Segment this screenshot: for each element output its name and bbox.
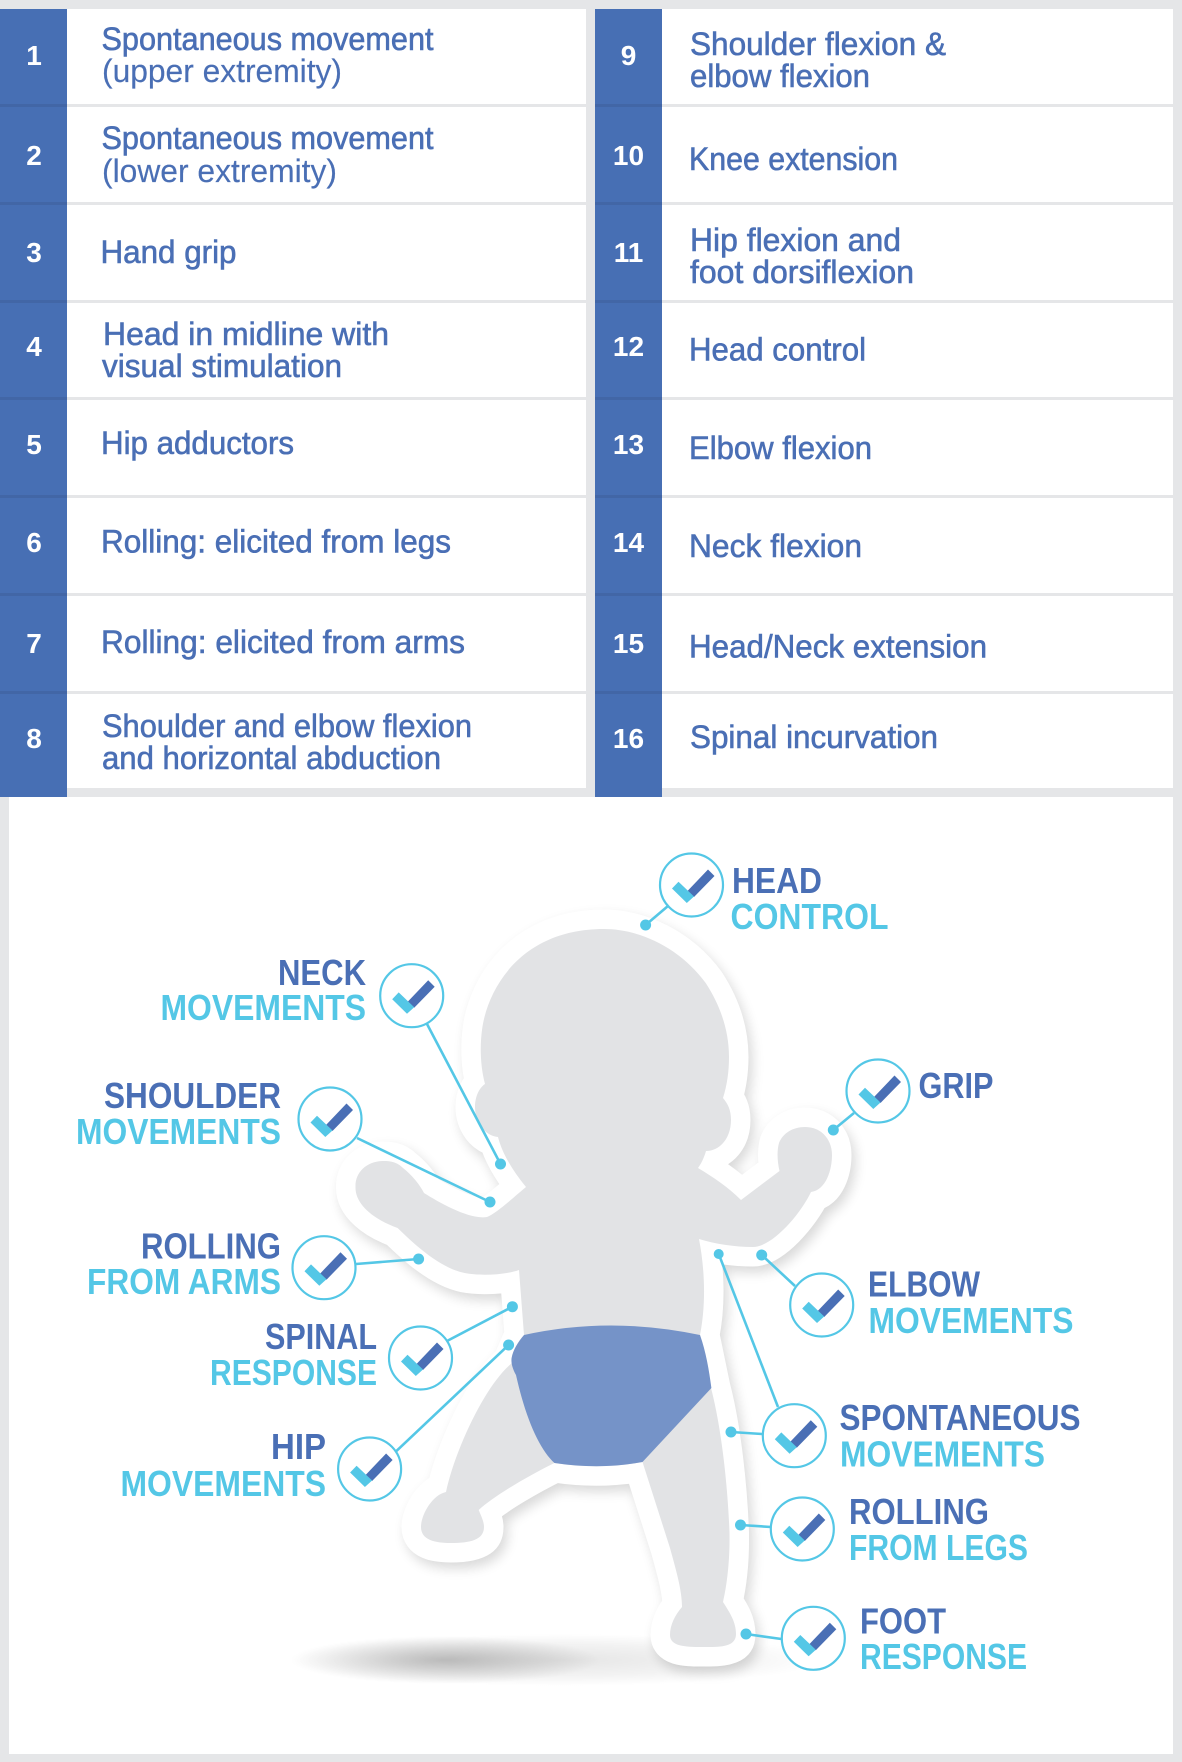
callout: head control: CONTROL [730, 896, 888, 937]
callout: neck movements: MOVEMENTS [160, 987, 366, 1028]
row 4: 4 [26, 331, 42, 362]
diaper [511, 1326, 711, 1466]
callout: hip movements [120, 1340, 514, 1504]
row 2: 2 [26, 140, 42, 171]
callout: hip movements: MOVEMENTS [120, 1463, 326, 1504]
callout: head control [640, 854, 888, 937]
row 2: (lower extremity) [102, 153, 337, 189]
row 9: elbow flexion [690, 58, 870, 94]
callout: rolling from arms [87, 1226, 424, 1302]
baby silhouette [355, 929, 832, 1647]
callout: rolling from arms: ROLLING [141, 1226, 281, 1266]
callout: elbow movements: ELBOW [868, 1264, 980, 1304]
callout: shoulder movements: MOVEMENTS [76, 1111, 281, 1152]
baby halo shadow [359, 935, 836, 1653]
row 4: visual stimulation [102, 348, 342, 384]
callout: spontaneous movements: SPONTANEOUS [840, 1397, 1080, 1438]
row 13 [613, 429, 872, 466]
row 13: 13 [613, 429, 644, 460]
row 1 [26, 21, 434, 89]
row 16: Spinal incurvation [690, 719, 938, 755]
callout: grip [828, 1060, 994, 1136]
callout: spinal response [210, 1301, 518, 1393]
row 8: and horizontal abduction [102, 740, 441, 776]
row 4 [26, 316, 389, 384]
callout: head control: HEAD [732, 860, 822, 901]
row 13: Elbow flexion [689, 430, 872, 466]
row 7: 7 [26, 628, 42, 659]
callout: foot response: FOOT [860, 1600, 946, 1642]
row 14: 14 [613, 527, 644, 558]
row 8: Shoulder and elbow flexion [102, 708, 472, 744]
row 2: Spontaneous movement [102, 120, 434, 156]
row 16: 16 [613, 723, 644, 754]
row 5: 5 [26, 429, 42, 460]
callout: grip: GRIP [918, 1065, 994, 1106]
row 1: 1 [26, 40, 42, 71]
callout: elbow movements [756, 1250, 1074, 1341]
row 6: Rolling: elicited from legs [101, 524, 451, 560]
row 11: Hip flexion and [690, 222, 901, 258]
callout: elbow movements: MOVEMENTS [868, 1300, 1074, 1341]
row 1: Spontaneous movement [102, 21, 434, 57]
row 11 [614, 222, 914, 290]
callout: neck movements [160, 952, 506, 1170]
row 1: (upper extremity) [102, 53, 342, 89]
row 12: 12 [613, 331, 644, 362]
callout: spontaneous movements [714, 1249, 1080, 1474]
panel: baby diagram [9, 797, 1173, 1754]
callout: rolling from arms: FROM ARMS [87, 1261, 281, 1302]
row 11: 11 [614, 237, 643, 268]
row 10: Knee extension [689, 141, 898, 177]
callout: foot response [740, 1600, 1027, 1677]
ground shadow [290, 1634, 825, 1686]
table: left column [0, 9, 586, 797]
callout: spinal response: RESPONSE [210, 1352, 377, 1393]
callout: spontaneous movements: MOVEMENTS [840, 1434, 1045, 1474]
row 8: 8 [26, 723, 42, 754]
callout: neck movements: NECK [278, 952, 366, 993]
row 3: 3 [26, 237, 42, 268]
callout: rolling from legs: ROLLING [849, 1491, 989, 1532]
callout: shoulder movements [76, 1075, 496, 1208]
row 9: Shoulder flexion & [690, 26, 946, 62]
row 12 [613, 331, 866, 368]
row 9: 9 [621, 40, 636, 71]
row 10 [613, 140, 898, 177]
row 4: Head in midline with [103, 316, 389, 352]
table: right column [595, 9, 1173, 797]
row 5: Hip adductors [101, 425, 294, 461]
row 14 [613, 527, 862, 564]
callout: hip movements: HIP [271, 1426, 326, 1467]
callout: spinal response: SPINAL [265, 1316, 377, 1357]
callout: rolling from legs [735, 1491, 1028, 1568]
row 3: Hand grip [100, 234, 236, 270]
row 8 [26, 708, 472, 776]
row 9 [621, 26, 946, 94]
row 15: Head/Neck extension [689, 628, 987, 664]
callout: foot response: RESPONSE [860, 1636, 1027, 1677]
row 12: Head control [689, 332, 866, 368]
row 14: Neck flexion [689, 528, 862, 564]
row 3 [26, 234, 236, 270]
row 6: 6 [26, 527, 42, 558]
callout: shoulder movements: SHOULDER [104, 1075, 281, 1116]
row 11: foot dorsiflexion [690, 254, 914, 290]
row 2 [26, 120, 434, 189]
row 7: Rolling: elicited from arms [101, 624, 465, 660]
callout: rolling from legs: FROM LEGS [849, 1527, 1028, 1568]
row 10: 10 [613, 140, 644, 171]
row 15: 15 [613, 628, 644, 659]
